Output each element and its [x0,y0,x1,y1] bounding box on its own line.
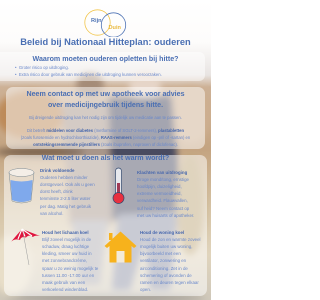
text: drink enough: tenminste 2-2.5 liter water [40,196,91,201]
text: dehydration complaints: Klachten van uitdroging [137,170,187,174]
text: keep body cool: verkoelend windenblad. [42,287,88,292]
panel: what to do [4,155,207,296]
text: medicines: (zoals furosemide en hydrochloorthiazide), RAAS-remmers (eindigen op -pril of -sartan) en [21,135,190,140]
logo: Duin [108,25,122,31]
text: keep home cool: bijvoorbeeld met een [140,251,181,256]
text: dehydration complaints: verwardheid. Flauwvallen, [137,198,188,203]
panel: why [0,52,205,81]
text: dehydration complaints: suf heid? Neem contact op [137,206,189,211]
text: keep home cool: Houd de zon en warmte zoveel [140,237,201,242]
bullet list: • Groter risico op uitdroging. [15,64,69,70]
text: keep body cool [42,230,98,292]
text: keep home cool: mogelijk buiten uw woning, [140,244,192,249]
text: keep body cool: met zonnebrandcrème, [42,258,87,263]
bullet list: • Extra risico door gebruik van medicijnen die uitdroging kunnen veroorzaken. [15,72,162,77]
text: dehydration complaints: met uw huisarts of apotheker. [137,213,194,218]
text: keep home cool: open. [140,287,151,292]
heading: contact: over medicijngebruik tijdens hitte. [48,101,163,109]
text: keep home cool: airconditioning. Zet in de [140,266,188,271]
text: medicines [21,128,190,147]
background photo [0,48,211,300]
text: drink enough: van alcohol. [40,211,63,216]
text: keep home cool: schemering of avonden de [140,273,192,278]
heading: contact [26,90,185,109]
text: medicines: ontstekingsremmende pijnstillers (zoals ibuprofen, naproxen of diclofenac). [33,142,178,147]
text: keep home cool: ramen en deuren tegen elkaar [140,280,199,285]
text: drink enough: dorst heeft, drink [40,189,73,194]
title: Beleid bij Nationaal Hitteplan: ouderen [20,36,191,46]
text: keep home cool [140,230,201,292]
text: drink enough: Ouderen hebben minder [40,175,88,180]
text: dehydration complaints [137,170,194,218]
heading: contact: Neem contact op met uw apotheek voor advies [26,90,185,98]
logo [84,9,126,37]
icon: thermometer [112,168,124,204]
text: dehydration complaints: hoofdpijn, duizeligheid, [137,184,182,189]
text: keep body cool: maak gebruik van een [42,280,85,285]
icon: glass of water [8,168,34,204]
text: dehydration: Bij dreigende uitdroging kan het nodig zijn om tijdelijk uw medicatie aan te passen. [29,114,182,120]
logo: Rijn [91,18,102,24]
text: keep body cool: kleding, smeer uw huid in [42,251,92,256]
text: drink enough [40,168,95,216]
text: keep home cool: ventilator, zonwering en [140,258,186,263]
text: dehydration complaints: Droge mond/tong, ernstige [137,177,189,182]
icon: house [104,232,136,262]
text: dehydration complaints: extreme vermoeidheid, [137,191,182,196]
heading: why: Waarom moeten ouderen opletten bij hitte? [33,54,178,62]
text: keep home cool: Houd de woning koel [140,230,184,234]
heading: what to do: Wat moet u doen als het warm wordt? [42,154,169,162]
text: keep body cool: tussen 11.00 -17.00 uur en [42,273,94,278]
bullet list [15,64,162,77]
text: keep body cool: Blijf zoveel mogelijk in de [42,237,91,242]
text: drink enough: dorstgevoel. Ook als u geen [40,182,95,187]
text: keep body cool: Houd het lichaam koel [42,230,89,234]
icon: parasol [10,228,40,265]
text: keep body cool: schaduw, draag luchtige [42,244,89,249]
text: keep body cool: spaar u zo weinig mogelijk te [42,266,98,271]
panel: contact [6,87,205,149]
text: drink enough: per dag. Matig het gebruik [40,204,91,209]
text: medicines: Dit betreft middelen voor diabetes (metformine of SGLT-2-remmers), plastabletten [27,128,184,132]
text: drink enough: Drink voldoende [40,168,74,172]
